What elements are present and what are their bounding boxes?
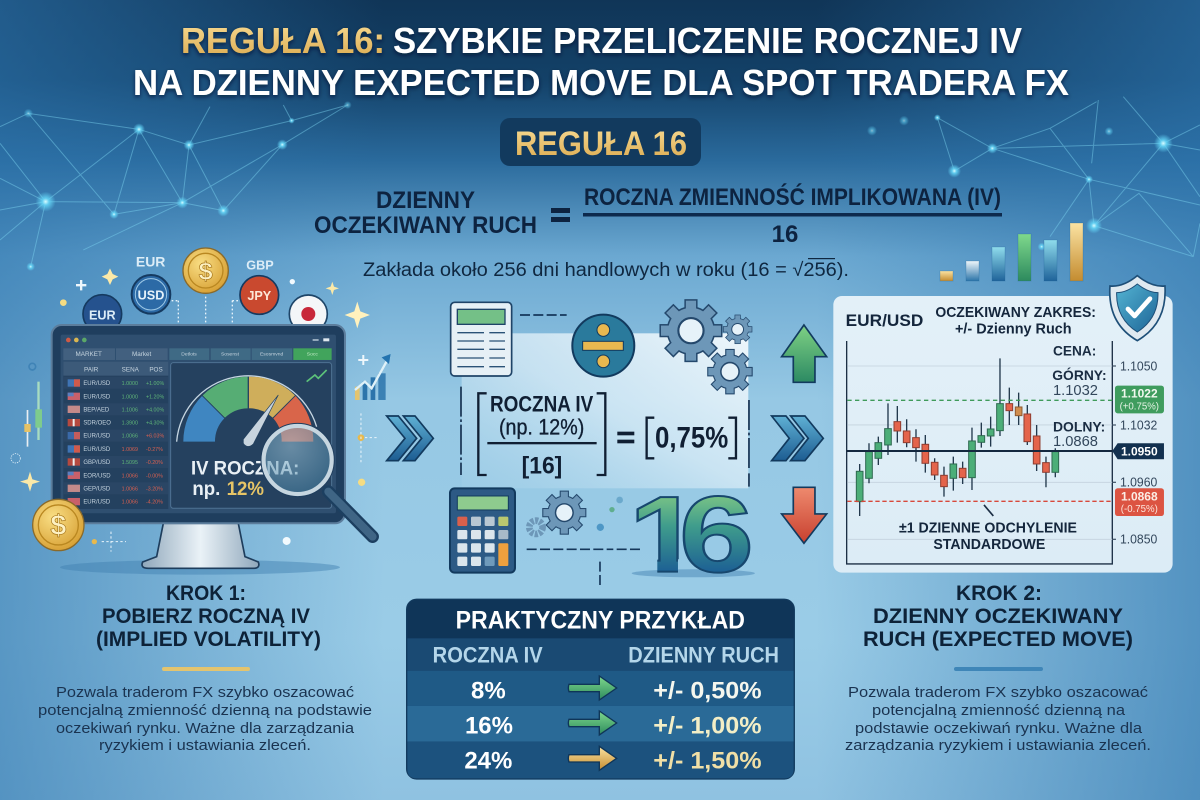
pair table: EUR/USD — [83, 447, 111, 453]
pair table: -4.20% — [146, 500, 163, 506]
step 2 description: zarządzania ryzykiem i ustawiania zleceń. — [845, 737, 1151, 754]
pair table — [63, 362, 168, 509]
badge: Reguła 16: REGUŁA 16 — [515, 125, 687, 163]
arrow: up — [782, 325, 827, 382]
standard deviation note: STANDARDOWE — [933, 537, 1045, 553]
pair table: +4.00% — [146, 407, 164, 413]
table heading: PRAKTYCZNY PRZYKŁAD — [456, 606, 745, 634]
pair table: 1.0069 — [122, 447, 138, 453]
formula: OCZEKIWANY RUCH — [314, 212, 537, 239]
pair table: +4.30% — [146, 421, 164, 427]
upper badge: (+0.75%) — [1120, 401, 1159, 412]
step 1 description — [38, 684, 372, 754]
step 1 description: ryzykiem i ustawiania zleceń. — [99, 737, 311, 754]
IV gauge panel: np. — [192, 479, 220, 500]
market tabs: Esosmvnd — [260, 352, 283, 358]
formula — [314, 183, 1002, 248]
pair table: POS — [149, 366, 163, 373]
pair table: GBP/USD — [83, 460, 111, 466]
step 1 heading: POBIERZ ROCZNĄ IV — [102, 605, 310, 628]
icon: division sign — [572, 315, 634, 377]
lower badge — [1115, 488, 1164, 516]
step 2 heading: DZIENNY OCZEKIWANY — [873, 605, 1123, 628]
big number 16: 6 — [679, 474, 754, 595]
pair table: PAIR — [84, 366, 99, 373]
price labels — [1052, 343, 1107, 450]
current price badge — [1112, 443, 1164, 459]
pair table: SENA — [122, 366, 140, 373]
market tabs: Sosenst — [221, 352, 240, 358]
price labels: CENA: — [1053, 343, 1096, 359]
row 8% — [471, 676, 762, 704]
pair table: +1.00% — [146, 381, 164, 387]
row 8%: +/- 0,50% — [653, 677, 762, 704]
row 8%: 8% — [471, 677, 506, 704]
small rising bars — [940, 223, 1083, 281]
pair table: EUR/USD — [83, 394, 111, 400]
pair table: 1.0000 — [122, 381, 138, 387]
formula fraction: [16] — [522, 452, 562, 479]
expected range lines — [847, 400, 1112, 501]
arrow: chevrons in — [387, 416, 433, 461]
central calculation panel — [387, 301, 827, 595]
price labels: 1.1032 — [1053, 383, 1098, 399]
pair table: EUR/USD — [83, 381, 111, 387]
axis labels — [1120, 359, 1157, 547]
currency coins: GBP — [246, 258, 274, 272]
pair table: +1.20% — [146, 394, 164, 400]
pair table: 1.0000 — [122, 394, 138, 400]
monitor stand — [60, 523, 340, 575]
pair table: BEP/AED — [83, 407, 110, 413]
monitor screen — [52, 325, 345, 523]
step 1 description: Pozwala traderom FX szybko oszacować — [56, 684, 355, 701]
currency coins: JPY — [247, 289, 272, 303]
row 24% — [464, 746, 762, 774]
pair table: EUR/USD — [83, 500, 111, 506]
formula: ROCZNA ZMIENNOŚĆ IMPLIKOWANA (IV) — [584, 183, 1001, 211]
pair table: -0.00% — [146, 473, 163, 479]
step 1 heading: KROK 1: — [166, 582, 246, 605]
standard deviation note: ±1 DZIENNE ODCHYLENIE — [899, 520, 1077, 536]
currency coins: USD — [138, 288, 164, 302]
lower badge: 1.0868 — [1121, 490, 1158, 504]
icon: small gears and dots — [529, 492, 623, 534]
market tabs: MARKET — [75, 351, 102, 358]
market tabs: Socc — [307, 352, 318, 358]
row 16% — [465, 711, 762, 739]
axis labels: 1.1032 — [1120, 418, 1157, 432]
currency coins — [83, 248, 327, 333]
pair table: EOR/USD — [83, 473, 111, 479]
title — [133, 20, 1069, 103]
chart header: EUR/USD — [846, 311, 923, 330]
pair table: 1.0066 — [122, 486, 138, 492]
pair table: 1.1006 — [122, 407, 138, 413]
pair table: -0.27% — [146, 447, 163, 453]
step 2 description — [845, 684, 1151, 754]
pair table: 1.0066 — [122, 434, 138, 440]
pair table: 1.0066 — [122, 500, 138, 506]
IV gauge panel: IV ROCZNA: — [191, 458, 299, 479]
icon: shield — [1110, 276, 1165, 341]
network decoration left — [0, 101, 352, 271]
small growth chart — [355, 354, 391, 400]
chart header: +/- Dzienny Ruch — [955, 320, 1072, 337]
step 1 description: oczekiwań rynku. Ważne dla zarządzania — [56, 720, 355, 737]
chart axes and grid — [847, 341, 1116, 564]
formula: DZIENNY — [376, 187, 475, 214]
illustration: monitor with IV gauge — [11, 248, 391, 575]
pair table: SDR/OEO — [83, 421, 111, 427]
arrow: chevrons out — [772, 416, 823, 461]
row 16%: 16% — [465, 712, 513, 739]
icon: gears — [661, 301, 752, 393]
network decoration right — [867, 97, 1200, 257]
upper badge — [1115, 386, 1164, 413]
IV gauge panel — [171, 363, 332, 508]
coin bottom left — [33, 499, 84, 551]
pair table: -0.20% — [146, 460, 163, 466]
step 2 description: potencjalną zmienność dzienną na — [872, 702, 1126, 719]
column headers — [433, 642, 779, 667]
title: SZYBKIE PRZELICZENIE ROCZNEJ IV — [393, 20, 1022, 61]
formula fraction: 0,75% — [655, 421, 728, 454]
current price badge: 1.0950 — [1121, 445, 1158, 459]
axis labels: 1.0850 — [1120, 533, 1157, 547]
price labels: GÓRNY: — [1052, 366, 1107, 383]
market tabs: Market — [132, 351, 152, 358]
candlesticks — [856, 358, 1059, 516]
currency coins: EUR — [136, 254, 165, 270]
column headers: DZIENNY RUCH — [628, 642, 779, 667]
price labels: DOLNY: — [1053, 419, 1105, 435]
chart header: OCZEKIWANY ZAKRES: — [935, 304, 1096, 321]
assumption note: Zakłada około 256 dni handlowych w roku (16 = √256). — [363, 260, 849, 281]
row 24%: +/- 1,50% — [653, 747, 762, 774]
IV gauge panel: 12% — [227, 479, 264, 500]
formula fraction — [478, 392, 736, 479]
step 2 heading: RUCH (EXPECTED MOVE) — [863, 628, 1133, 651]
formula fraction: ROCZNA IV — [490, 392, 594, 417]
axis labels: 1.1050 — [1120, 359, 1157, 373]
formula: 16 — [772, 221, 798, 248]
axis labels: 1.0960 — [1120, 476, 1157, 490]
standard deviation note — [899, 505, 1077, 553]
big number 16 — [629, 474, 755, 595]
step 1 heading — [96, 582, 321, 651]
row 16%: +/- 1,00% — [653, 712, 762, 739]
lower badge: (-0.75%) — [1121, 504, 1158, 515]
market tabs — [63, 348, 332, 360]
pair table: EUR/USD — [83, 434, 111, 440]
pair table: 1.3900 — [122, 421, 138, 427]
chart header — [846, 304, 1096, 337]
market tabs: Detlots — [181, 352, 197, 358]
table: practical example — [407, 599, 794, 779]
magnifying glass — [261, 423, 373, 537]
step 1 description: potencjalną zmienność dzienną na podstawie — [38, 702, 372, 719]
column headers: ROCZNA IV — [433, 642, 543, 667]
step 2 description: Pozwala traderom FX szybko oszacować — [848, 684, 1149, 701]
coin bottom left: $ — [50, 510, 66, 542]
step 2 heading: KROK 2: — [956, 582, 1042, 605]
pair table: GEP/USD — [83, 486, 111, 492]
icon: document — [451, 302, 512, 376]
pair table: 1.5095 — [122, 460, 138, 466]
title: REGUŁA 16: — [181, 20, 385, 61]
pair table: 1.0066 — [122, 473, 138, 479]
pair table: +6.03% — [146, 434, 164, 440]
currency coins: EUR — [89, 308, 116, 322]
formula fraction: (np. 12%) — [499, 414, 584, 439]
chart panel: EUR/USD — [833, 276, 1173, 573]
pair table: -3.20% — [146, 486, 163, 492]
big number 16: 1 — [629, 474, 702, 595]
price labels: 1.0868 — [1053, 434, 1098, 450]
currency coins: $ — [199, 257, 213, 285]
arrow: down — [782, 487, 827, 543]
step 1 heading: (IMPLIED VOLATILITY) — [96, 628, 321, 651]
step 2 description: podstawie oczekiwań rynku. Ważne dla — [855, 720, 1143, 737]
icon: calculator — [450, 488, 515, 573]
step 2 heading — [863, 582, 1133, 651]
row 24%: 24% — [464, 747, 512, 774]
upper badge: 1.1022 — [1121, 386, 1158, 400]
sparkles and dots — [11, 268, 378, 552]
title: NA DZIENNY EXPECTED MOVE DLA SPOT TRADERA FX — [133, 62, 1069, 103]
